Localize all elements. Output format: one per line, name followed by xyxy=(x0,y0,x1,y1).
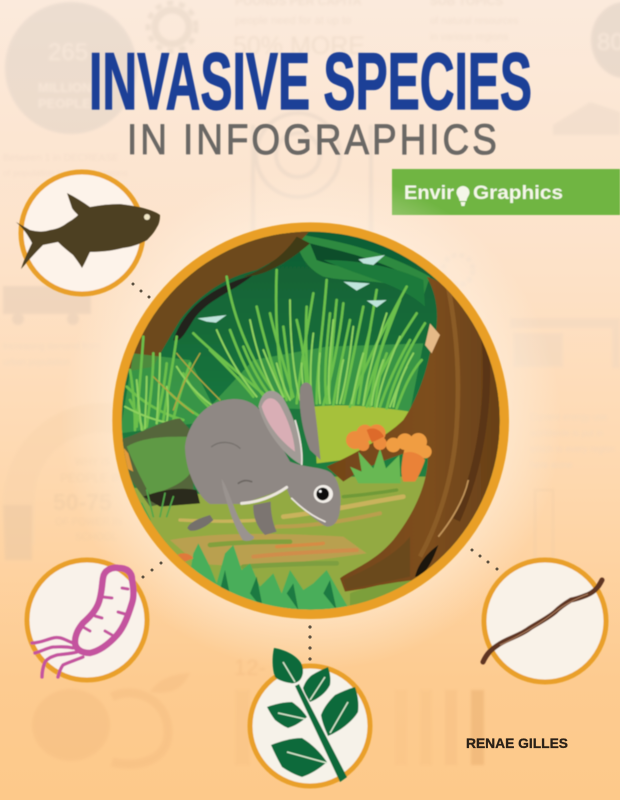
main illustration circle: rabbit in forest xyxy=(110,220,510,620)
series banner: Graphics xyxy=(473,183,563,204)
rabbit xyxy=(185,383,341,541)
species circle: plant xyxy=(250,648,370,786)
small grass by log xyxy=(142,490,173,520)
species circle: bacteria xyxy=(27,560,147,680)
rabbit near front leg xyxy=(222,478,254,541)
ghost: chart right xyxy=(510,318,620,368)
ghost: small text: Increasing demand from xyxy=(3,341,100,351)
title xyxy=(89,37,532,164)
ghost: donut chart: OF POWER IN xyxy=(55,517,122,528)
tree arch xyxy=(129,232,309,370)
icon: light bulb xyxy=(456,186,470,206)
ghost: small text: here alone xyxy=(530,460,573,470)
rabbit far leg xyxy=(253,502,277,535)
series banner xyxy=(392,169,620,215)
ghost: small text: Between 1 in DECREASE xyxy=(3,153,119,164)
ghost: gear xyxy=(148,3,196,51)
dotted connectors xyxy=(132,282,498,661)
rabbit hind foot xyxy=(187,515,213,531)
icon: fish xyxy=(16,193,160,269)
ghost: donut chart: 50-75 xyxy=(53,489,112,515)
ghost: top stat text xyxy=(233,0,518,60)
ghost: 12 label: 12- xyxy=(234,655,266,680)
rabbit far ear xyxy=(300,383,321,460)
rabbit fur lines xyxy=(212,442,325,522)
rabbit eye xyxy=(314,485,333,503)
mossy log xyxy=(120,418,193,507)
ghost: bus xyxy=(3,286,91,325)
ghost: donut chart: PEOPLE IN xyxy=(60,471,123,485)
ghost: globe circle: 265 xyxy=(48,39,88,66)
species circle: fish xyxy=(16,172,160,294)
ghost: small text: urban population xyxy=(3,357,70,367)
ghost: donut chart xyxy=(3,403,140,560)
ghost: small text: worldwide is put in xyxy=(529,428,604,438)
ghost: top stat text: in various regions xyxy=(430,32,508,43)
icon: worm xyxy=(483,580,602,662)
ghost: globe circle: PEOPLE xyxy=(38,96,91,111)
species circle: worm xyxy=(483,560,606,682)
icon: leaf sprig xyxy=(267,648,358,782)
ghost: house xyxy=(553,102,620,135)
butterflies xyxy=(197,255,387,323)
ghost: top stat text: of natural resources xyxy=(430,16,518,27)
rabbit body and head xyxy=(185,399,341,527)
tree trunk xyxy=(327,277,510,592)
ghost: water drop xyxy=(591,2,620,78)
ghost: top stat text: people need for at up to xyxy=(235,15,351,27)
ghost: small text: of population in several regions xyxy=(3,168,128,178)
author name: RENAE GILLES xyxy=(466,736,568,751)
ghost: apples xyxy=(32,673,190,764)
ghost: globe circle xyxy=(5,2,137,134)
ground xyxy=(134,476,426,606)
forest backdrop xyxy=(121,231,500,606)
subtitle line: in infographics: IN INFOGRAPHICS xyxy=(127,116,497,164)
ghost: thermometer xyxy=(535,490,553,560)
icon: bacterium xyxy=(32,568,134,677)
ghost: top stat text: 50% MORE xyxy=(233,32,365,60)
grass blades xyxy=(127,270,425,430)
ghost: small text: Current energy use xyxy=(530,412,607,422)
bush and mushrooms xyxy=(350,448,401,483)
series banner: Envir xyxy=(404,183,455,204)
grass underlay xyxy=(120,343,423,433)
ghost: plate and cutlery xyxy=(253,113,371,232)
glow behind main circle xyxy=(61,171,561,671)
ghost: bar columns xyxy=(235,690,484,765)
ghost: gear right xyxy=(443,255,473,285)
ghost: small text xyxy=(3,153,615,470)
ghost: globe circle: MILLION xyxy=(38,80,91,95)
ghost: donut chart: WHY IS xyxy=(75,457,111,468)
rabbit near ear xyxy=(258,391,302,465)
ghost: donut chart: SCHOOL xyxy=(75,532,118,543)
meadow strip xyxy=(313,405,410,463)
foreground grass xyxy=(190,543,348,610)
ghost: small text: which to every region xyxy=(529,444,615,454)
